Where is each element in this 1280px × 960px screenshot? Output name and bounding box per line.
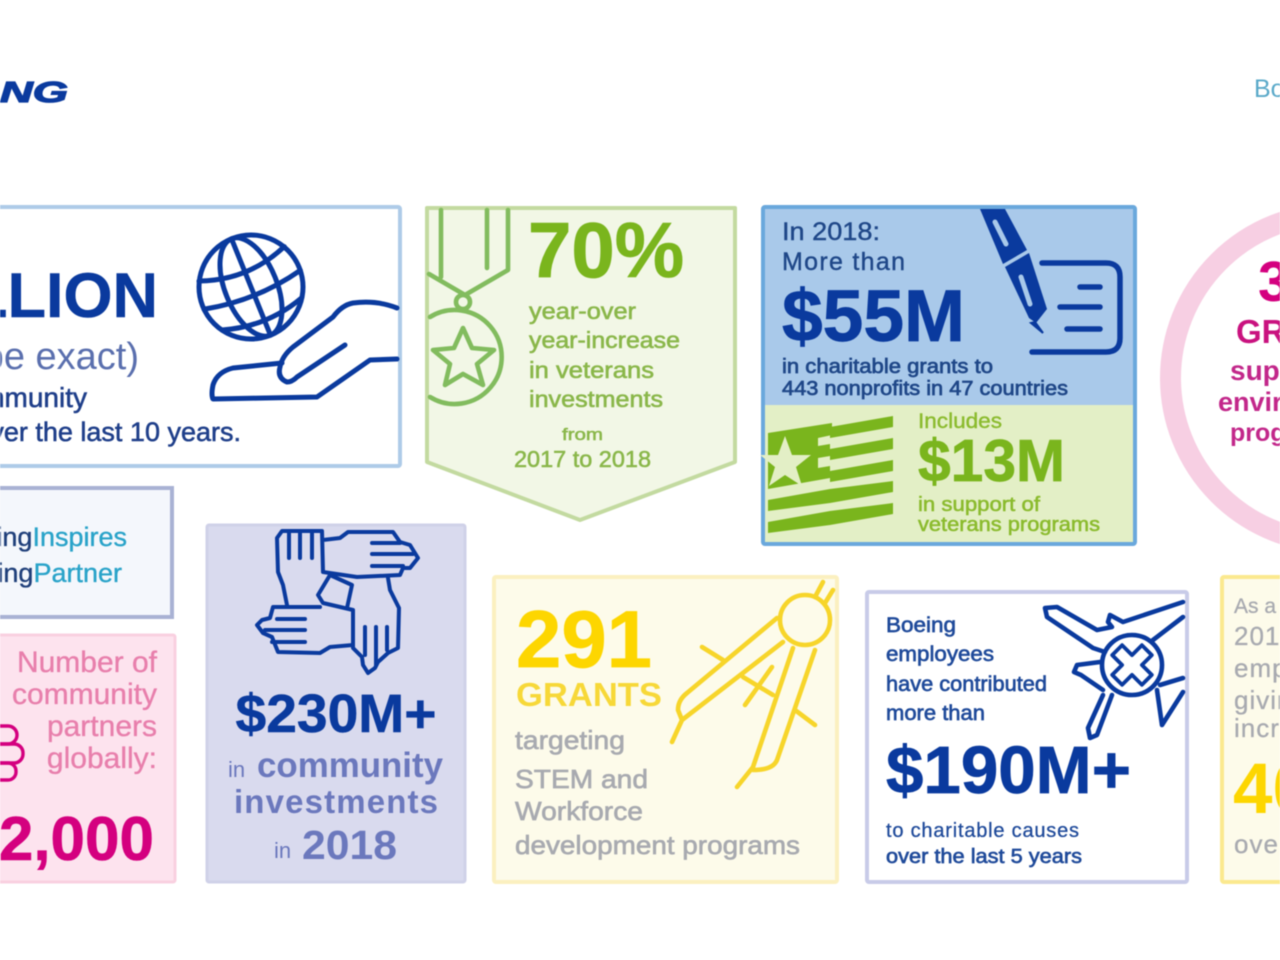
veterans text xyxy=(918,410,1100,536)
hashtag text xyxy=(0,522,127,588)
stat: 70%: 70% xyxy=(528,206,684,294)
description: globally: xyxy=(47,742,157,775)
stat: 291: 291 xyxy=(516,595,652,685)
intro text: more than xyxy=(886,702,985,725)
panel frame xyxy=(207,525,465,882)
description: Number of xyxy=(17,646,158,679)
description: investments xyxy=(529,386,663,412)
veterans text: $13M xyxy=(918,428,1065,494)
veterans text: in support of xyxy=(918,494,1040,516)
panel frame xyxy=(0,488,172,617)
description: year-increase xyxy=(529,327,680,353)
description: partners xyxy=(47,710,157,743)
description: community xyxy=(257,746,444,785)
description: community xyxy=(12,678,157,711)
icon: pen and cheque xyxy=(980,209,1120,352)
panel: hashtags xyxy=(0,488,172,617)
description: to charitable causes xyxy=(886,820,1079,842)
description xyxy=(529,298,680,412)
description: in xyxy=(228,757,245,782)
intro text: In 2018: xyxy=(782,218,880,246)
panel frame xyxy=(763,207,1135,544)
description: targeting xyxy=(515,725,625,755)
panel: community investments 2018 xyxy=(207,525,465,882)
intro text: have contributed xyxy=(886,673,1047,696)
ring xyxy=(1170,214,1280,542)
date range xyxy=(514,425,651,472)
description: in charitable grants to xyxy=(782,356,993,378)
stat: $190M+: $190M+ xyxy=(886,733,1131,808)
description: 2018 xyxy=(302,822,397,868)
icon: four joined hands xyxy=(257,531,418,673)
intro text: More than xyxy=(782,248,905,276)
panel frame xyxy=(0,207,400,466)
badge shield xyxy=(427,208,735,520)
description xyxy=(515,725,800,860)
panel: charitable grants xyxy=(760,207,1135,544)
grants label: GRANTS xyxy=(516,676,662,713)
veterans text: Includes xyxy=(918,410,1002,433)
veterans text: veterans programs xyxy=(918,514,1100,536)
description: in veterans xyxy=(529,357,654,383)
description: year-over xyxy=(529,298,636,324)
panel frame xyxy=(0,635,175,882)
description: 443 nonprofits in 47 countries xyxy=(782,378,1068,400)
icon: compass xyxy=(672,582,833,787)
description: investments xyxy=(234,783,438,820)
panel frame xyxy=(494,577,837,882)
description: development programs xyxy=(515,830,800,860)
panel: veterans investment badge xyxy=(427,206,735,520)
panel: employee contributions xyxy=(867,592,1187,882)
intro text: Boeing xyxy=(886,614,956,637)
intro text xyxy=(886,614,1047,725)
panel frame xyxy=(867,592,1187,882)
description xyxy=(0,382,241,447)
description: in xyxy=(274,838,291,863)
panel: STEM grants xyxy=(494,577,837,882)
intro text: employees xyxy=(886,643,994,666)
description: over the last 5 years xyxy=(886,846,1082,868)
description xyxy=(228,746,444,868)
logo: Boeing wordmark cropped: NG xyxy=(0,77,68,109)
stat: $230M+: $230M+ xyxy=(236,684,436,744)
panel: total community investment xyxy=(0,207,400,466)
description xyxy=(782,356,1068,400)
stat: $55M: $55M xyxy=(782,276,965,357)
panel frame xyxy=(1222,577,1280,882)
icon: flower cropped xyxy=(0,726,23,780)
date range: from xyxy=(562,425,603,444)
panel top fill xyxy=(763,207,1135,405)
description xyxy=(1234,595,1280,743)
icon: airplane with medical cross xyxy=(1045,602,1183,738)
description: STEM and xyxy=(515,764,648,794)
panel: environmental grants circle xyxy=(1170,214,1280,542)
icon: flag xyxy=(760,416,893,533)
description: Workforce xyxy=(515,796,643,826)
icon: medal xyxy=(429,210,508,404)
description xyxy=(886,820,1082,868)
panel: employee giving increase xyxy=(1222,577,1280,882)
description xyxy=(1218,355,1280,447)
description xyxy=(12,646,158,775)
date range: 2017 to 2018 xyxy=(514,446,651,472)
panel bottom fill xyxy=(763,405,1135,544)
icon: globe in hand xyxy=(183,219,397,399)
intro text xyxy=(782,218,905,276)
stat: partners count: 2,000 xyxy=(0,805,154,874)
panel: community partners xyxy=(0,635,175,882)
